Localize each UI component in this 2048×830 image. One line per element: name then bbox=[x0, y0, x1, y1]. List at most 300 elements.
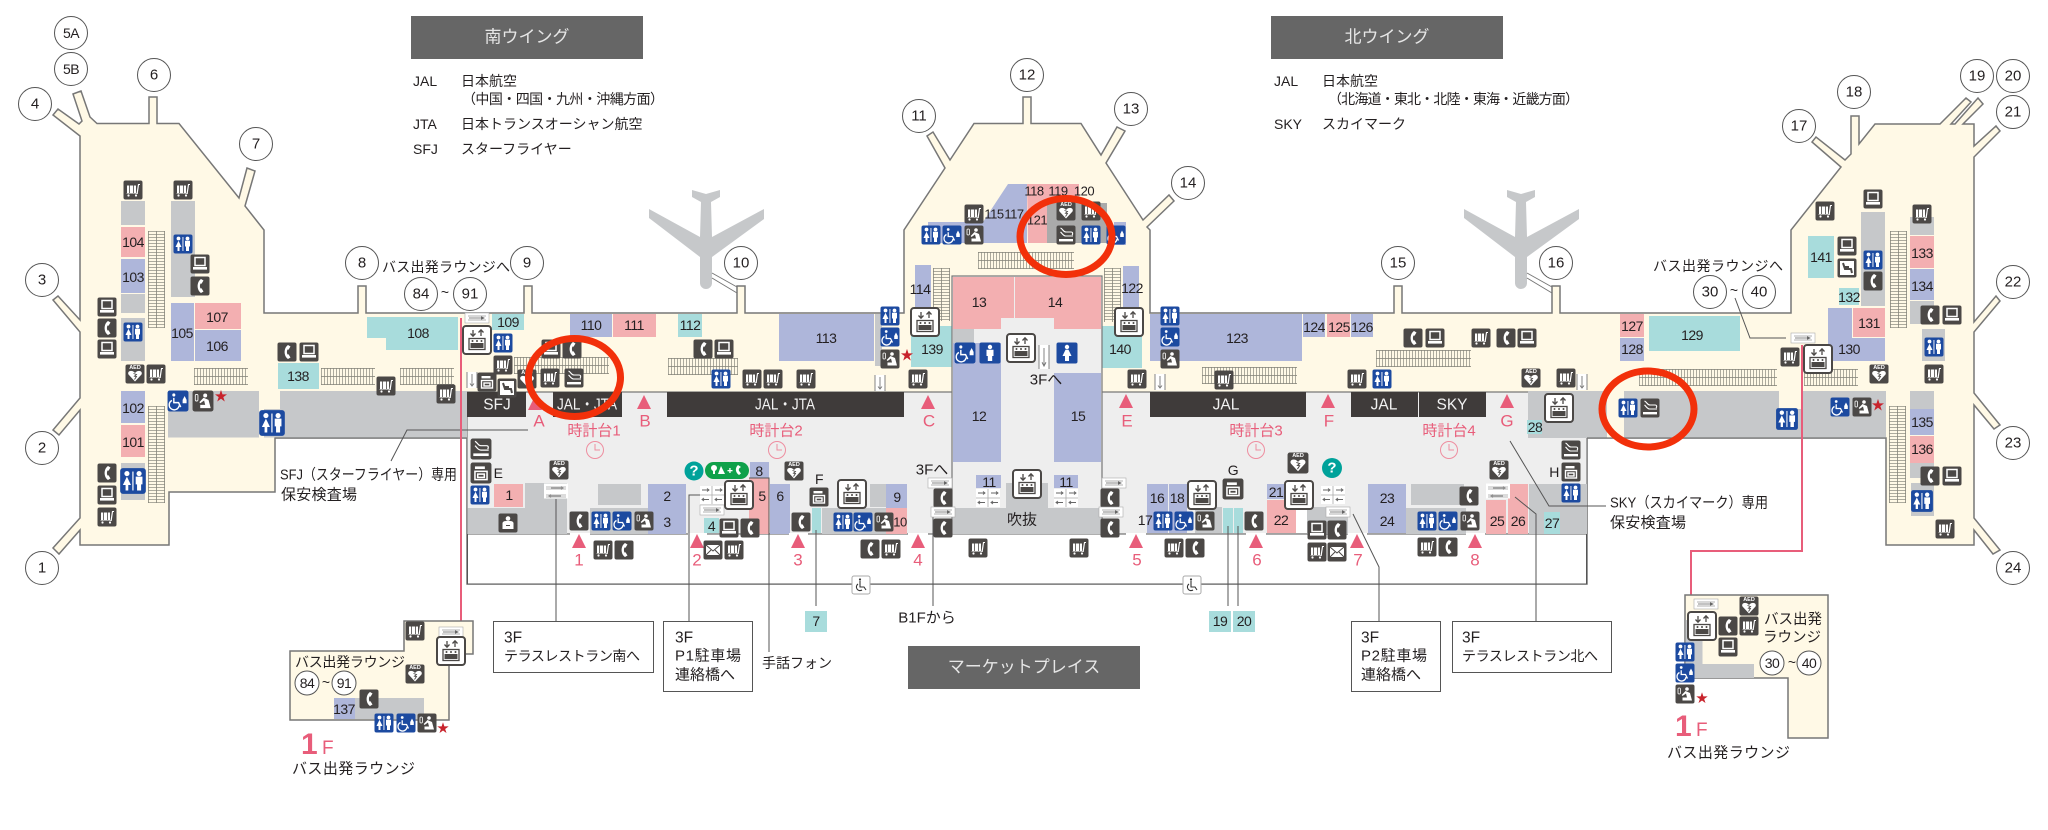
icon: wheelchair bbox=[1174, 512, 1194, 530]
icon: AED: AED bbox=[521, 370, 533, 376]
label boxes 7, 19, 20: 19 bbox=[1213, 613, 1228, 629]
room 6: 6 bbox=[776, 488, 784, 504]
icon: computer bbox=[1942, 306, 1962, 324]
icon: walkway bbox=[700, 505, 724, 515]
label: 3F up centre: 3Fへ bbox=[1030, 372, 1062, 388]
callout: terrace restaurant north bbox=[1452, 622, 1612, 672]
icon: computer bbox=[98, 298, 116, 316]
rooms 115-121: 118 bbox=[1024, 184, 1044, 198]
icon: phone bbox=[694, 340, 712, 358]
entrance markers A-G: E bbox=[1121, 412, 1133, 430]
room 8 bbox=[750, 462, 769, 479]
icon: cart bbox=[436, 384, 456, 404]
legend: south wing airlines: SFJ bbox=[413, 141, 438, 157]
icon: phone bbox=[1920, 306, 1940, 324]
escalators pier bbox=[978, 252, 1121, 322]
void and rooms 11: 11 bbox=[1059, 474, 1073, 490]
legend: north wing airlines: スカイマーク bbox=[1322, 116, 1406, 132]
icon: computer bbox=[190, 254, 210, 274]
icon: information: ? bbox=[689, 462, 699, 480]
legend: north wing airlines: 日本航空 bbox=[1322, 73, 1378, 89]
icon: phone bbox=[1186, 538, 1204, 558]
rooms 19-20 strips bbox=[1223, 508, 1243, 533]
icon: computer bbox=[1308, 520, 1326, 540]
icon: cart bbox=[724, 540, 744, 560]
entrance markers 1-8: 7 bbox=[1353, 550, 1363, 570]
icon: cart bbox=[174, 180, 192, 200]
icon: AED bbox=[1870, 364, 1888, 384]
callout: P1 parking: 連絡橋へ bbox=[675, 666, 735, 684]
icon: wheelchair bbox=[1830, 398, 1850, 416]
lounge gates: 84 bbox=[300, 675, 315, 691]
shop blocks 101-107: 103 bbox=[122, 269, 145, 285]
rooms 135-136: 136 bbox=[1911, 441, 1934, 457]
icon: cart bbox=[146, 364, 166, 384]
room 4: 4 bbox=[708, 518, 716, 534]
floor label 1F north: バス出発ラウンジ bbox=[1667, 744, 1790, 762]
icon: computer bbox=[300, 342, 318, 362]
airline counter bars: SFJ bbox=[483, 396, 511, 414]
red highlight ring: north smoking room bbox=[1602, 371, 1694, 447]
gate numbers: 2 bbox=[38, 440, 46, 456]
legend: north wing airlines: SKY bbox=[1274, 116, 1303, 132]
airline counter bars: JAL bbox=[1371, 396, 1398, 414]
rooms 132-134, 141: 132 bbox=[1838, 289, 1861, 305]
lounge floor bbox=[1685, 595, 1828, 738]
room 138 bbox=[278, 363, 319, 389]
icon: toilet bbox=[374, 714, 394, 732]
icon: cart bbox=[1082, 202, 1100, 220]
gate numbers: 21 bbox=[2005, 104, 2021, 120]
icon: phone bbox=[1718, 616, 1738, 636]
icon: small elevator bbox=[478, 372, 496, 392]
legend: south wing airlines: （中国・四国・九州・沖縄方面） bbox=[462, 91, 664, 107]
icon: information: ? bbox=[1327, 460, 1337, 476]
lounge gates bbox=[295, 671, 356, 695]
room 110: 110 bbox=[581, 317, 602, 333]
icon: cart bbox=[1780, 348, 1800, 366]
icon: walkway bbox=[1791, 333, 1815, 343]
gate numbers: 10 bbox=[733, 254, 749, 272]
shop blocks 101-107: 106 bbox=[206, 338, 229, 354]
floor label 1F north bbox=[1667, 710, 1790, 762]
letter labels E F G H bbox=[494, 462, 1559, 487]
icon: walkway bbox=[1099, 507, 1123, 517]
icon: AED: AED bbox=[1743, 597, 1755, 603]
label boxes 7, 19, 20 bbox=[805, 611, 1255, 632]
heading: north wing bbox=[1271, 16, 1503, 59]
icon: mail bbox=[704, 540, 722, 560]
callout: SFJ security: SFJ（スターフライヤー）専用 bbox=[280, 466, 457, 484]
star: ★ bbox=[214, 388, 228, 404]
icon: walkway bbox=[928, 478, 952, 488]
lounge floor bbox=[290, 621, 473, 720]
callout: SFJ security: 保安検査場 bbox=[281, 486, 357, 504]
icons: north wing bbox=[1160, 190, 1962, 538]
legend: north wing airlines bbox=[1274, 73, 1579, 132]
floor label 1F south bbox=[292, 728, 415, 778]
icon: walkway block bbox=[700, 486, 724, 504]
icon: AED: AED bbox=[1292, 453, 1304, 459]
escalators bbox=[148, 231, 950, 503]
gate numbers: 8 bbox=[358, 254, 366, 272]
icon: cart bbox=[124, 180, 142, 200]
panel: north wing rooms bbox=[1150, 212, 1945, 516]
callout: terrace restaurant south: 3F bbox=[504, 630, 522, 646]
icon: AED bbox=[406, 664, 424, 684]
clock tower 4 bbox=[1422, 422, 1476, 458]
icon: baby room bbox=[418, 714, 436, 732]
rooms 127-128 bbox=[1620, 314, 1644, 361]
entrance markers A-G: B bbox=[639, 412, 651, 430]
icon: toilet bbox=[120, 468, 146, 494]
room 1 bbox=[494, 484, 523, 507]
letter labels E F G H: G bbox=[1228, 462, 1238, 478]
icon: phone bbox=[740, 518, 760, 538]
icon: phone bbox=[792, 512, 810, 532]
icon: phone bbox=[98, 464, 116, 482]
icon: phone bbox=[562, 340, 582, 358]
icon: toilet bbox=[712, 370, 730, 388]
departure concourse floor bbox=[467, 392, 1587, 584]
entrance markers A-G: C bbox=[923, 412, 935, 430]
heading: south wing bbox=[411, 16, 643, 59]
icons: south wing far end bbox=[98, 180, 456, 526]
icon: AED: AED bbox=[409, 665, 421, 671]
entrance markers 1-8 bbox=[572, 534, 1482, 570]
rooms 115-121: 115 bbox=[984, 206, 1004, 222]
icon: escalator arrow bbox=[467, 372, 477, 388]
icon: toilet bbox=[1562, 484, 1580, 502]
icon: phone bbox=[1460, 486, 1478, 506]
gate numbers: 5B bbox=[63, 61, 79, 77]
central hall block: 14 bbox=[1048, 294, 1063, 310]
icon: phone bbox=[1100, 488, 1120, 508]
lounge title: バス出発ラウンジ bbox=[295, 654, 405, 670]
legend: north wing airlines: JAL bbox=[1274, 73, 1298, 89]
entrance markers A-G: A bbox=[533, 412, 545, 430]
lounge grey zones bbox=[1686, 620, 1754, 678]
label: from B1F: B1Fから bbox=[898, 610, 956, 626]
gate numbers: 1 bbox=[38, 560, 46, 576]
icon: elevator bbox=[1545, 394, 1573, 422]
icon: wheelchair bbox=[880, 328, 900, 346]
rooms 16-18 bbox=[1138, 484, 1187, 533]
icon: cart bbox=[98, 508, 116, 526]
rooms 124-126: 126 bbox=[1351, 319, 1374, 335]
heading: south wing: 南ウイング bbox=[484, 28, 570, 46]
icon: phone bbox=[1920, 466, 1940, 486]
rooms 132-134, 141: 134 bbox=[1911, 278, 1934, 294]
heading: market place: マーケットプレイス bbox=[948, 658, 1100, 676]
icon: walkway bbox=[1486, 484, 1510, 498]
shop grey blocks bbox=[468, 483, 1587, 534]
icon: elevator bbox=[725, 481, 753, 509]
star: ★ bbox=[437, 721, 449, 735]
icon: locker bbox=[1223, 479, 1243, 499]
room 8: 8 bbox=[755, 463, 763, 479]
icon: mail bbox=[1328, 542, 1346, 562]
lounge title: バス出発 bbox=[1764, 611, 1822, 628]
label boxes 7, 19, 20: 7 bbox=[812, 613, 820, 629]
legend: south wing airlines: 日本航空 bbox=[461, 73, 517, 89]
panel: bus lounge south 1F bbox=[290, 621, 473, 778]
icon: baby room bbox=[1852, 398, 1872, 416]
escalators north bbox=[1202, 231, 1907, 503]
icon: cart bbox=[882, 540, 900, 558]
rooms 16-18: 17 bbox=[1138, 512, 1153, 528]
gate numbers: 22 bbox=[2005, 274, 2021, 290]
room 108 bbox=[367, 317, 458, 350]
label: sign language phone: 手話フォン bbox=[762, 655, 832, 671]
rooms 127-128: 127 bbox=[1621, 318, 1644, 334]
letter labels E F G H: F bbox=[815, 471, 823, 487]
star: ★ bbox=[1871, 398, 1885, 412]
room 28: 28 bbox=[1528, 419, 1543, 435]
icon: phone bbox=[98, 318, 116, 338]
icon: AED: AED bbox=[1493, 461, 1505, 467]
gate numbers: 18 bbox=[1846, 84, 1862, 100]
icon: locker bbox=[810, 488, 828, 506]
rooms 115-121: 121 bbox=[1027, 212, 1047, 228]
letter labels E F G H: H bbox=[1549, 464, 1559, 480]
gate numbers: 14 bbox=[1180, 174, 1196, 192]
icons: south wing near centre bbox=[463, 306, 939, 398]
icon: toilet bbox=[1160, 306, 1180, 326]
icon: computer bbox=[1518, 328, 1536, 348]
icon: cart bbox=[1924, 364, 1944, 384]
icon: cart bbox=[796, 370, 816, 388]
shop blocks 101-107: 105 bbox=[171, 325, 194, 341]
icon: toilet bbox=[1911, 490, 1933, 512]
icon: cart bbox=[964, 204, 984, 224]
icon: AED: AED bbox=[129, 365, 141, 371]
airline counter bars bbox=[467, 392, 1486, 417]
entrance markers A-G bbox=[528, 394, 1514, 430]
void and rooms 11: 11 bbox=[982, 474, 996, 490]
icon: AED bbox=[1288, 453, 1308, 473]
floor label 1F north: 1 bbox=[1675, 710, 1692, 743]
rooms 115-121 bbox=[928, 184, 1126, 245]
red highlight ring: south smoking room bbox=[528, 338, 620, 416]
callout: P2 parking: P2駐車場 bbox=[1361, 648, 1427, 664]
label: bus lounge gates 84-91: バス出発ラウンジへ bbox=[382, 259, 510, 275]
icon: cart bbox=[1164, 538, 1184, 558]
clock tower 1 bbox=[567, 422, 621, 458]
label: bus lounge gates 84-91: 84 bbox=[413, 286, 429, 302]
rooms 139 and 140: 139 bbox=[921, 341, 944, 357]
icon: phone bbox=[190, 276, 210, 296]
label: bus lounge gates 84-91 bbox=[382, 259, 510, 310]
icon: toilet bbox=[470, 486, 490, 504]
icon: smoking room bbox=[564, 368, 584, 388]
icon: phone bbox=[1328, 520, 1346, 540]
rooms 124-126 bbox=[1303, 314, 1374, 337]
icon: seat bbox=[1838, 258, 1856, 278]
icon: phone bbox=[860, 540, 880, 558]
room 4 bbox=[704, 518, 719, 534]
label: bus lounge gates 84-91: ~ bbox=[441, 284, 449, 300]
icon: baby room bbox=[1196, 512, 1214, 530]
clock tower 2: 時計台2 bbox=[749, 422, 803, 440]
rooms 130-131: 130 bbox=[1838, 341, 1861, 357]
rooms 132-134, 141: 133 bbox=[1911, 245, 1934, 261]
lounge gates: 40 bbox=[1802, 655, 1817, 671]
icon: elevator bbox=[838, 480, 866, 508]
icon: computer bbox=[1864, 190, 1882, 208]
icon: wheelchair bbox=[1160, 328, 1180, 346]
entrance markers 1-8: 3 bbox=[793, 550, 803, 570]
accessible route marker east bbox=[1183, 576, 1201, 594]
callout: SKY security bbox=[1610, 494, 1768, 532]
icon: toilet bbox=[1372, 370, 1392, 388]
icon: AED: AED bbox=[1525, 369, 1537, 375]
icon: phone bbox=[1496, 328, 1516, 348]
gate numbers: 3 bbox=[38, 272, 46, 288]
star: ★ bbox=[900, 348, 914, 362]
lounge room 137 bbox=[333, 698, 424, 719]
lounge gates: 30 bbox=[1765, 655, 1780, 671]
icon: toilet bbox=[174, 234, 192, 254]
gate numbers: 11 bbox=[911, 108, 927, 124]
rooms 135-136 bbox=[1910, 391, 1934, 516]
icon: computer bbox=[542, 340, 560, 358]
icon: women toilet bbox=[1056, 342, 1078, 364]
gate numbers bbox=[18, 16, 2030, 584]
icons: concourse north bbox=[1154, 440, 1580, 562]
icon: elevator bbox=[1285, 481, 1313, 509]
icon: elevator bbox=[1188, 481, 1216, 509]
legend: south wing airlines bbox=[413, 73, 664, 157]
icon: elevator bbox=[1013, 470, 1041, 498]
icon: escalator arrow bbox=[1577, 374, 1587, 390]
rooms 25-26 bbox=[1486, 484, 1528, 534]
icon: phone bbox=[1404, 328, 1422, 348]
icon: walkway block bbox=[976, 489, 1000, 507]
icon: baby room bbox=[964, 226, 984, 244]
gate numbers: 9 bbox=[523, 254, 531, 272]
icon: baby room bbox=[874, 512, 894, 532]
entrance markers 1-8: 4 bbox=[913, 550, 923, 570]
rooms 132-134, 141 bbox=[1808, 212, 1945, 361]
icon: toilet bbox=[1864, 250, 1882, 270]
icon: staff bbox=[498, 514, 518, 532]
lounge title: ラウンジ bbox=[1763, 629, 1821, 646]
callout: terrace restaurant north: 3F bbox=[1462, 630, 1480, 646]
airline counter bars: SKY bbox=[1436, 396, 1468, 414]
icon: baby room bbox=[1160, 350, 1180, 368]
lounge gates: 91 bbox=[337, 675, 352, 691]
icon: AED: AED bbox=[1873, 365, 1885, 371]
label: bus lounge gates 30-40: ~ bbox=[1730, 282, 1738, 298]
gate numbers: 6 bbox=[150, 66, 158, 84]
icon: AED bbox=[550, 460, 568, 480]
central hall block: 15 bbox=[1071, 408, 1086, 424]
icon: cart bbox=[1214, 370, 1234, 390]
icons: central pier bbox=[922, 202, 1165, 558]
icon: toilet bbox=[1676, 642, 1694, 662]
pink route lines to bus lounges bbox=[461, 318, 1802, 632]
icon: wheelchair bbox=[942, 226, 962, 244]
icon: locker bbox=[1562, 462, 1580, 482]
floor label 1F north: F bbox=[1696, 720, 1708, 741]
rooms 115-121: 117 bbox=[1004, 206, 1024, 222]
room 27 bbox=[1544, 512, 1560, 534]
panel: concourse south shops bbox=[468, 419, 1587, 534]
icon: toilet bbox=[124, 322, 142, 342]
icon: elevator bbox=[1007, 334, 1035, 362]
rooms 114 and 122: 122 bbox=[1121, 280, 1144, 296]
rooms 25-26: 25 bbox=[1490, 513, 1505, 529]
icon: phone bbox=[934, 518, 952, 538]
panel: south wing far end rooms bbox=[121, 201, 950, 503]
callout: terrace restaurant south: テラスレストラン南へ bbox=[504, 648, 640, 664]
icon: elevator bbox=[1804, 345, 1832, 373]
rooms 115-121: 119 bbox=[1048, 184, 1068, 198]
icon: walkway bbox=[1326, 507, 1350, 517]
lounge title bbox=[1763, 611, 1822, 646]
callout: P1 parking: 3F bbox=[675, 630, 693, 646]
entrance markers 1-8: 1 bbox=[574, 550, 584, 570]
rooms 16-18: 18 bbox=[1170, 490, 1185, 506]
icon: walkway bbox=[1102, 478, 1126, 488]
gate numbers: 20 bbox=[2005, 68, 2021, 84]
icon: airplane north bbox=[1464, 190, 1579, 293]
icon: elevator bbox=[1688, 612, 1716, 640]
room 113 bbox=[779, 314, 882, 366]
airline counter bars: JAL bbox=[1213, 396, 1240, 414]
icon: elevator bbox=[911, 308, 939, 336]
room 5 bbox=[749, 478, 769, 534]
callout: SFJ security bbox=[280, 466, 457, 504]
room 129 bbox=[1649, 316, 1740, 351]
rooms 9-10: 9 bbox=[893, 489, 901, 505]
entrance markers A-G: G bbox=[1500, 412, 1514, 430]
icon: wheelchair bbox=[1106, 226, 1126, 244]
icon: cart bbox=[1936, 520, 1954, 538]
icon: computer bbox=[98, 486, 116, 504]
icon: smoking room bbox=[471, 439, 491, 459]
icon: phone bbox=[570, 512, 588, 530]
icon: AED bbox=[1490, 460, 1508, 480]
icon: escalator arrow bbox=[875, 375, 885, 391]
room 111: 111 bbox=[624, 317, 645, 333]
rooms 2-3: 2 bbox=[663, 488, 671, 504]
clock tower 3 bbox=[1229, 422, 1283, 458]
connector lines to callouts bbox=[391, 430, 1606, 652]
icon: computer bbox=[1426, 328, 1444, 348]
icon: cart bbox=[1308, 542, 1326, 562]
callout: P2 parking: 連絡橋へ bbox=[1361, 666, 1421, 684]
rooms 139 and 140: 140 bbox=[1109, 341, 1132, 357]
label: bus lounge gates 30-40: 40 bbox=[1751, 284, 1767, 300]
letter labels E F G H: E bbox=[494, 465, 503, 481]
icon: phone bbox=[614, 540, 634, 560]
room 123: 123 bbox=[1226, 330, 1249, 346]
panel: south wing security and grey zones bbox=[168, 391, 467, 438]
floor label 1F south: F bbox=[322, 738, 334, 759]
rooms 130-131 bbox=[1828, 308, 1885, 361]
callout: P1 parking: P1駐車場 bbox=[675, 648, 741, 664]
legend: south wing airlines: 日本トランスオーシャン航空 bbox=[461, 116, 642, 132]
icon: toilet bbox=[1082, 226, 1100, 244]
callout: terrace restaurant south bbox=[494, 622, 654, 672]
icon: smoking room bbox=[1640, 398, 1660, 418]
icon: locker bbox=[471, 463, 491, 483]
icon: cart bbox=[1816, 202, 1834, 220]
icon: walkway bbox=[544, 484, 568, 498]
room 138: 138 bbox=[287, 368, 310, 384]
